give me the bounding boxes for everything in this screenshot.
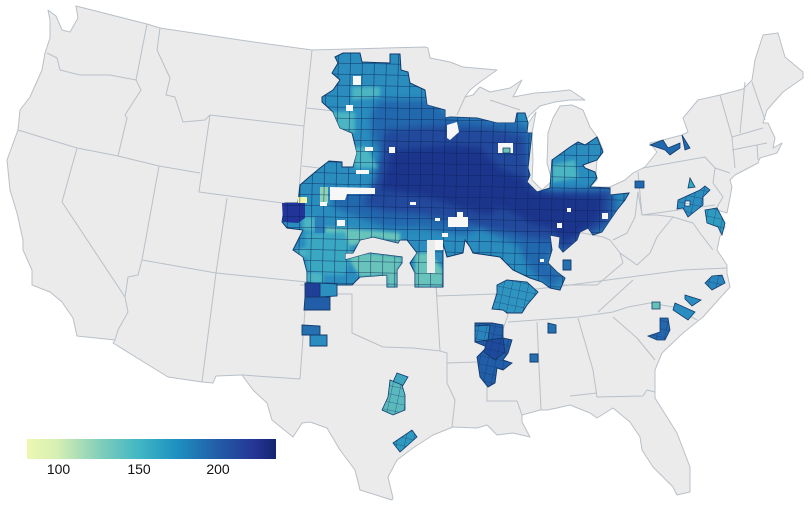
navy counties: northeast colorado	[282, 203, 305, 223]
base light blue counties	[282, 53, 629, 290]
bare strip in southern kansas	[427, 240, 435, 273]
county data: corn belt main region	[280, 50, 632, 290]
teal counties: south dakota, nebraska and michigan	[295, 87, 578, 285]
county cluster: texas coast	[393, 430, 417, 452]
county cluster: southeast missouri and western kentucky	[492, 280, 538, 313]
light teal counties: kansas	[325, 227, 443, 287]
county clusters: northeast	[635, 135, 725, 235]
cool green county	[320, 187, 328, 203]
sampling gaps	[320, 76, 608, 262]
pale yellow county	[298, 197, 307, 203]
legend tick labels: 150	[127, 461, 151, 477]
single counties: alabama and mississippi	[530, 260, 571, 362]
mid blue county block	[315, 217, 325, 233]
county cluster: mississippi delta	[475, 323, 512, 387]
graded colour bands	[295, 87, 620, 288]
fine county lines over small clusters	[382, 186, 725, 452]
county grid overlay	[280, 50, 632, 290]
legend gradient bar	[27, 439, 276, 459]
state borders	[18, 24, 767, 427]
county cluster: north texas	[382, 373, 408, 415]
county clusters: colorado and new mexico border	[302, 283, 337, 346]
legend tick labels	[47, 461, 230, 477]
county clusters: carolinas	[648, 275, 725, 340]
legend tick labels: 200	[206, 461, 230, 477]
legend tick labels: 100	[47, 461, 70, 477]
blue-teal counties: western kansas	[305, 232, 352, 275]
legend: colour scale	[27, 439, 276, 477]
wisconsin teal county	[503, 148, 510, 153]
blurred colour layers	[330, 100, 620, 288]
